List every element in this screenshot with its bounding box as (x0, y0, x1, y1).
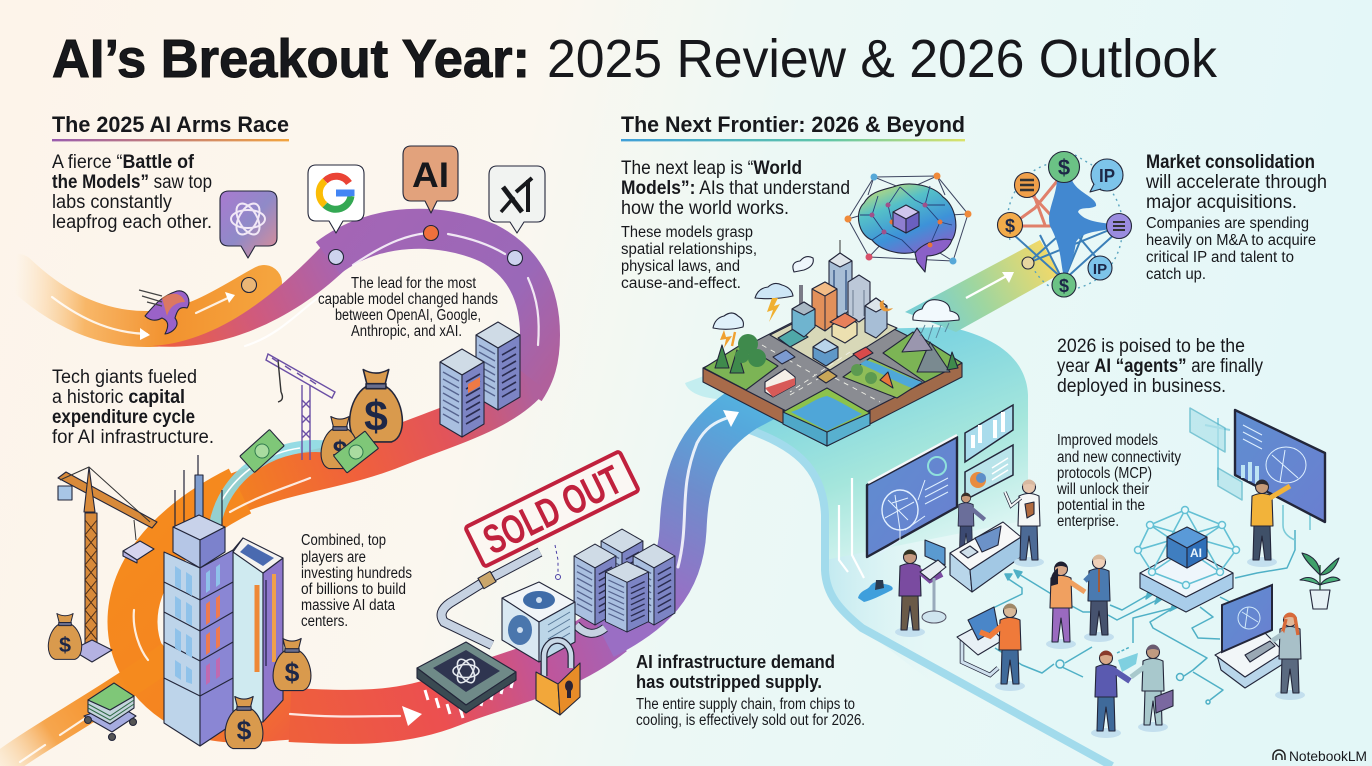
text: market consolidation: critical IP and talent to (1146, 249, 1294, 266)
text: demand outstripped supply: AI infrastructure demand (636, 651, 835, 672)
text: world models: spatial relationships, (621, 241, 757, 258)
title: AI’s Breakout Year: (52, 29, 530, 89)
text: world models (621, 158, 850, 292)
money bags and cash: $ (333, 435, 348, 465)
money bags and cash (240, 370, 402, 473)
text: agents (1057, 336, 1263, 397)
text: MCP: enterprise. (1057, 513, 1119, 530)
text: lead changed hands: capable model changed hands (318, 291, 498, 308)
main road: capital expenditure path (0, 229, 775, 766)
handshake couple (1046, 554, 1114, 649)
potted plant (1300, 553, 1340, 609)
blue cloud icon (858, 580, 893, 602)
text: MCP (1056, 432, 1181, 530)
text: world models: cause-and-effect. (621, 275, 741, 292)
text: combined investment: massive AI data (301, 597, 395, 614)
text: battle of the models (52, 152, 212, 233)
money bags by tower: $ (285, 657, 300, 687)
text: world models: These models grasp (621, 224, 753, 241)
text: battle of the models: A fierce “Battle of (52, 152, 195, 173)
orange starting road (18, 272, 264, 340)
seated man at desk (955, 493, 985, 556)
text: capital expenditure (52, 367, 214, 448)
construction crane (58, 467, 157, 662)
NotebookLM watermark: NotebookLM (1289, 748, 1367, 764)
text: agents: deployed in business. (1057, 376, 1226, 397)
server towers on upper road (476, 322, 520, 410)
logo bubble: xAI (489, 166, 545, 233)
market consolidation network: IP (1093, 261, 1107, 278)
chip with logo (417, 642, 516, 718)
text: MCP: will unlock their (1056, 481, 1149, 498)
text: market consolidation (1145, 152, 1327, 283)
padlock (536, 640, 580, 715)
money bags by tower (225, 638, 311, 749)
text: market consolidation: Market consolidation (1146, 152, 1315, 173)
title (52, 29, 1218, 89)
teal pathway band to agents (685, 327, 1372, 766)
text: capital expenditure: Tech giants fueled (52, 367, 197, 388)
text: capital expenditure: expenditure cycle (52, 407, 195, 428)
market consolidation network (998, 152, 1132, 297)
market consolidation network: IP (1099, 166, 1115, 186)
sold out stamp: SOLD OUT (476, 456, 629, 563)
text: world models: Models”: AIs that understand (621, 178, 850, 199)
text: demand outstripped supply (636, 651, 865, 729)
text: combined investment: Combined, top (301, 532, 386, 549)
weather clouds (713, 257, 959, 348)
market consolidation network: $ (1005, 216, 1015, 236)
text: world models: The next leap is “World (621, 158, 802, 179)
text: world models: how the world works. (621, 198, 789, 219)
text: market consolidation: catch up. (1146, 266, 1206, 283)
text: combined investment: investing hundreds (301, 565, 412, 582)
text: combined investment: centers. (301, 613, 348, 630)
text: agents: year AI “agents” are finally (1057, 356, 1263, 377)
road nodes (242, 226, 522, 292)
icon: runner mascot (139, 290, 189, 334)
main data center tower (164, 455, 233, 746)
money bags by tower: $ (237, 715, 252, 745)
logo bubble: OpenAI (220, 191, 277, 258)
small crane (266, 354, 335, 460)
text: market consolidation: will accelerate through (1145, 172, 1327, 193)
text: demand outstripped supply: cooling, is effectively sold out for 2026. (636, 712, 865, 729)
AI hub (1134, 506, 1240, 612)
text: capital expenditure: for AI infrastructure. (52, 427, 214, 448)
sold out stamp (465, 451, 640, 569)
man in yellow at screen (1247, 480, 1290, 567)
cart with cash (84, 683, 136, 740)
text: MCP: Improved models (1057, 432, 1158, 449)
handshake pair with briefcase (1091, 644, 1173, 738)
monitor workstation (1215, 585, 1284, 688)
text: demand outstripped supply: The entire supply chain, from chips to (636, 696, 855, 713)
title: 2025 Review & 2026 Outlook (547, 29, 1218, 89)
big screen right (1235, 410, 1325, 522)
logo bubble: Google (308, 165, 364, 233)
text: battle of the models: labs constantly (52, 192, 172, 213)
text: lead changed hands: between OpenAI, Google, (335, 307, 481, 324)
heading: the next frontier: The Next Frontier: 2026 & Beyond (621, 112, 965, 137)
presenter in white shirt (1005, 480, 1044, 567)
text: MCP: potential in the (1057, 497, 1145, 514)
text: combined investment: players are (301, 549, 366, 566)
text: market consolidation: major acquisitions. (1146, 192, 1297, 213)
rainbow arrow to market consolidation (905, 240, 1060, 332)
text: capital expenditure: a historic capital (52, 387, 185, 408)
circuit lines (839, 408, 1310, 704)
heading: the 2025 AI arms race: The 2025 AI Arms Race (52, 112, 289, 137)
text: battle of the models: leapfrog each other. (52, 212, 212, 233)
money bag near crane: $ (59, 632, 71, 657)
text: battle of the models: the Models” saw top (52, 172, 212, 193)
woman at workstation (1272, 612, 1305, 700)
big screen left (867, 435, 957, 557)
logo bubble: Anthropic (403, 146, 458, 213)
reception desk (950, 522, 1021, 592)
AI hub: AI (1190, 546, 1202, 560)
text: world models: physical laws, and (621, 258, 740, 275)
text: agents: 2026 is poised to be the (1057, 336, 1245, 357)
money bag near crane (48, 614, 82, 659)
cooling unit (502, 582, 575, 662)
world model city platform (703, 240, 962, 446)
pipes (442, 545, 605, 645)
text: combined investment (301, 532, 412, 630)
logo bubble: Anthropic: AI (412, 156, 449, 195)
money bags and cash: $ (364, 393, 388, 441)
text: combined investment: of billions to build (301, 581, 406, 598)
text: lead changed hands (318, 275, 498, 340)
text: MCP: protocols (MCP) (1057, 465, 1152, 482)
second data center building (233, 538, 283, 722)
text: MCP: and new connectivity (1057, 449, 1181, 466)
text: market consolidation: Companies are spending (1146, 215, 1309, 232)
text: market consolidation: heavily on M&A to acquire (1146, 232, 1316, 249)
market consolidation network: $ (1059, 276, 1069, 296)
man at podium (895, 540, 946, 637)
city towers (792, 240, 893, 366)
text: lead changed hands: The lead for the most (351, 275, 477, 292)
market consolidation network: $ (1058, 155, 1070, 180)
text: lead changed hands: Anthropic, and xAI. (351, 323, 462, 340)
brain world model (844, 172, 972, 272)
laptop desk and man (957, 604, 1025, 691)
small dashboards (965, 405, 1013, 500)
server cluster (574, 529, 675, 632)
text: demand outstripped supply: has outstripped supply. (636, 671, 822, 692)
